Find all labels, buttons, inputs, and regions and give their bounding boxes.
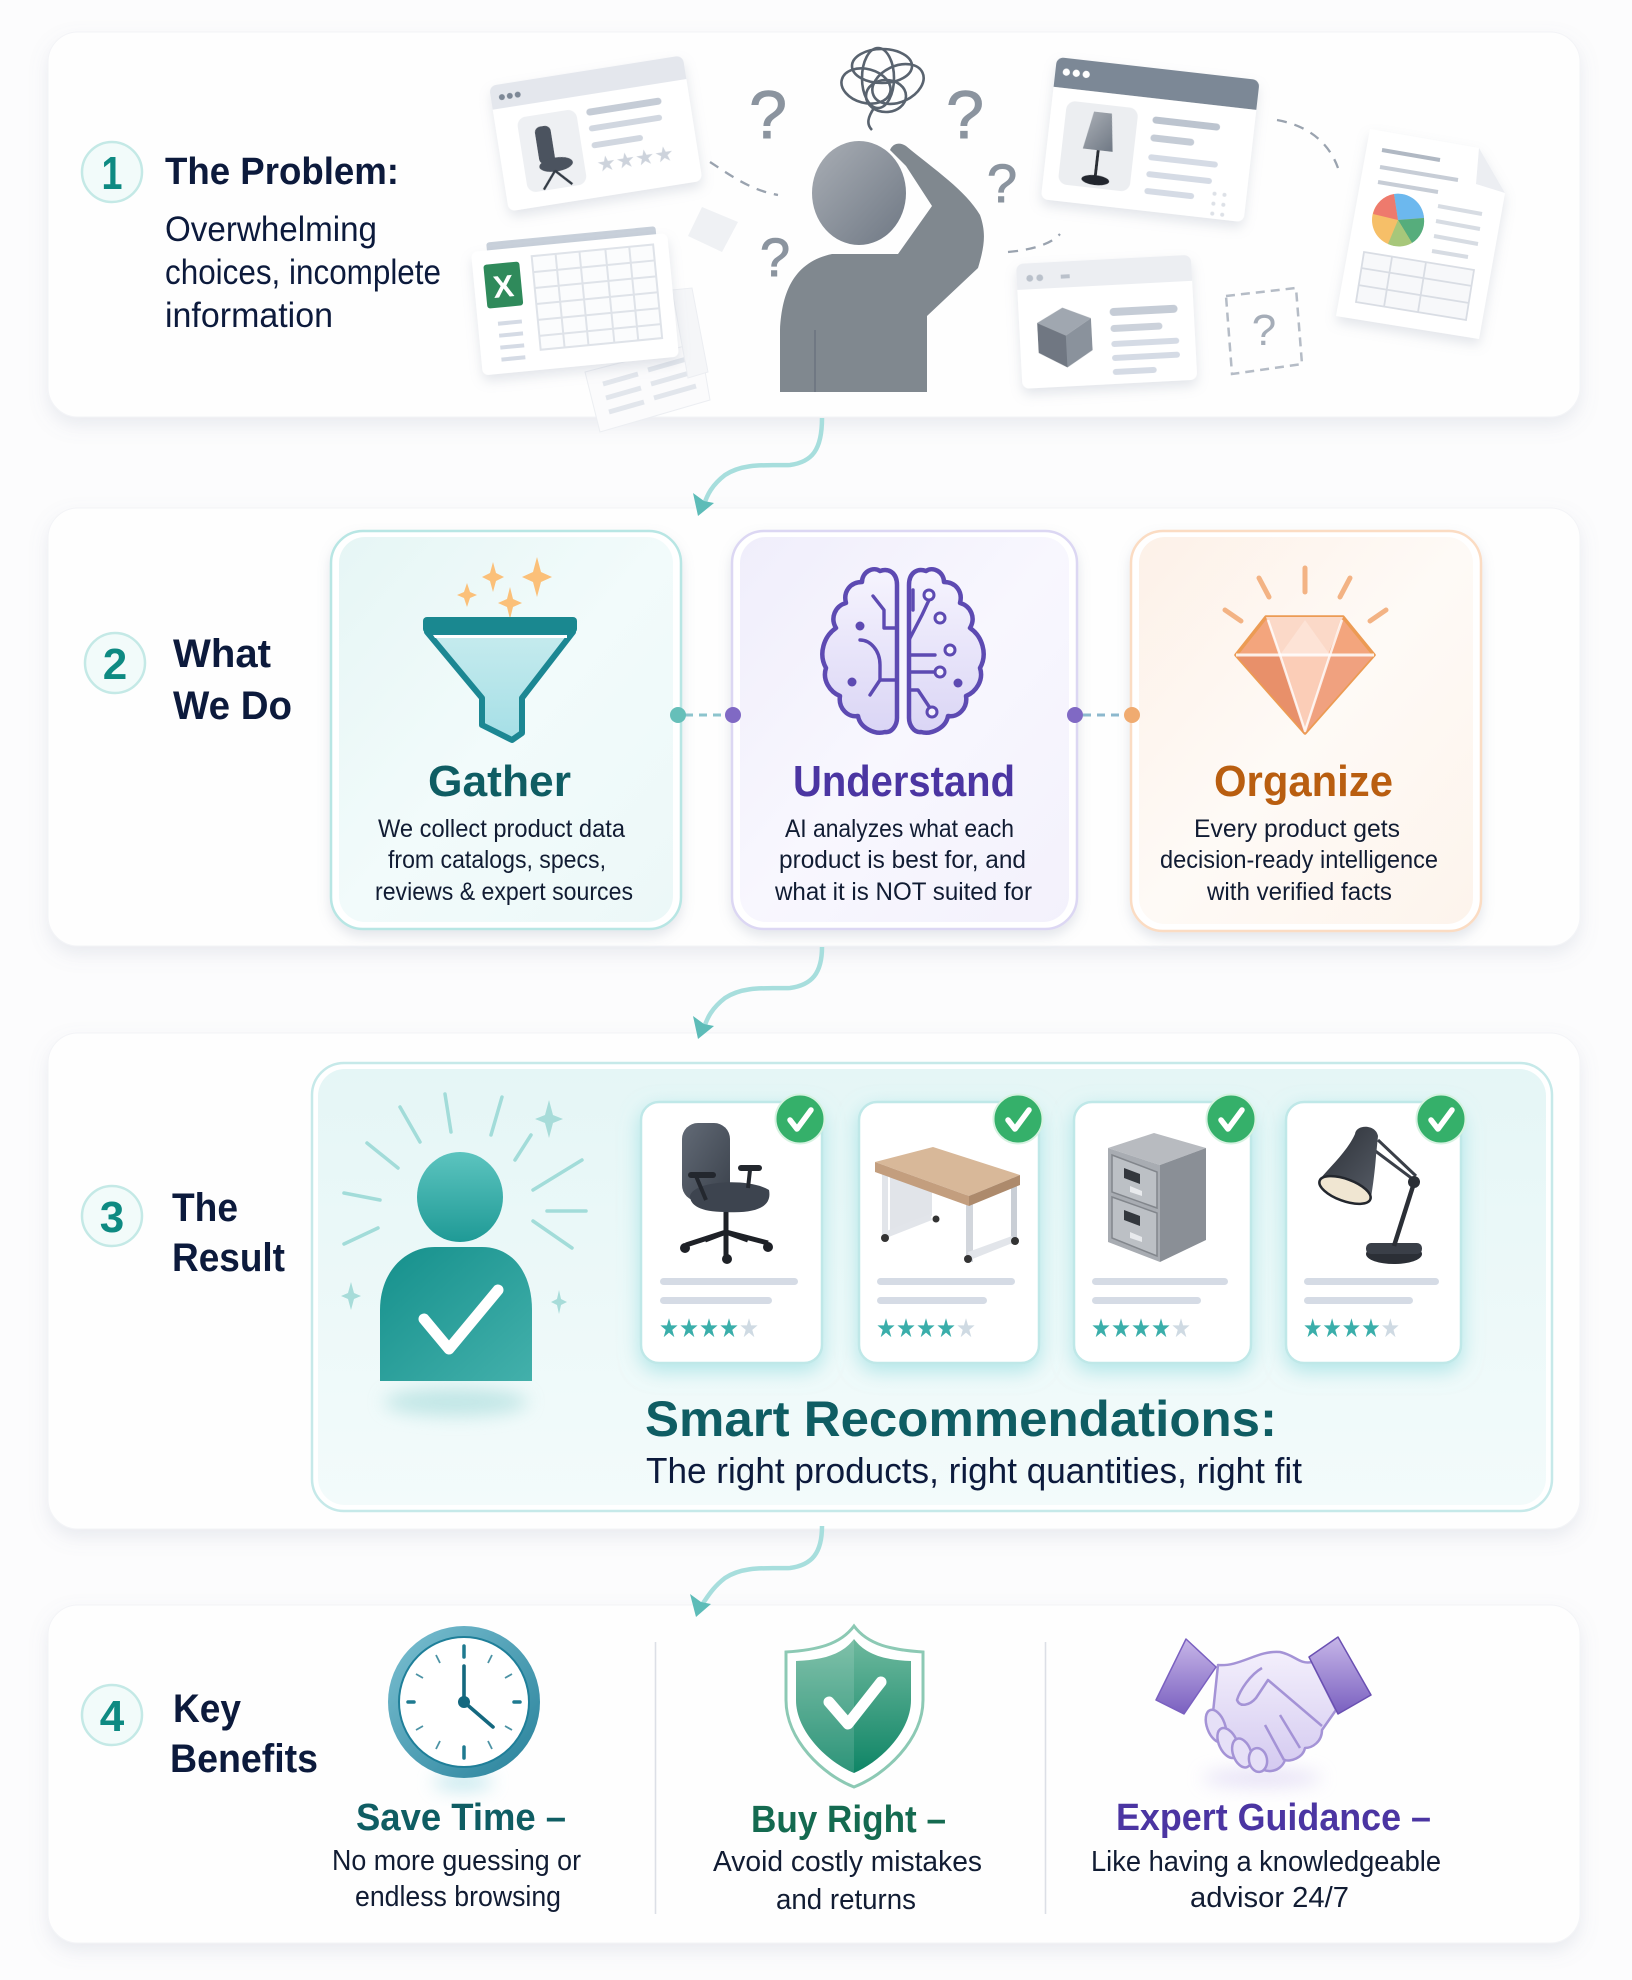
heading: save time: Save Time – — [356, 1797, 566, 1839]
icon: desk lamp — [1316, 1127, 1422, 1264]
heading: the result — [172, 1186, 285, 1280]
product card: filing cabinet — [1074, 1102, 1251, 1363]
text: gather description: from catalogs, specs, — [388, 846, 606, 874]
card: organize — [1131, 531, 1481, 931]
icon: rays above diamond — [1225, 568, 1386, 621]
icon: office chair — [680, 1123, 773, 1264]
text: gather description — [375, 815, 633, 906]
decorative dashed trails — [710, 120, 1338, 252]
icon: funnel — [423, 617, 577, 740]
icon: confused person — [780, 141, 984, 392]
text: problem description: choices, incomplete — [165, 253, 441, 292]
product card: desk lamp — [1286, 1102, 1461, 1363]
benefit: buy right — [713, 1626, 982, 1916]
panel: the result — [48, 1033, 1580, 1529]
placeholder lines and stars — [659, 1278, 798, 1343]
step badge 4 — [82, 1685, 142, 1745]
text: buy right description: Avoid costly mistakes — [713, 1846, 982, 1878]
icon: shield with check — [786, 1626, 923, 1787]
text: organize description: decision-ready intelligence — [1160, 846, 1438, 874]
benefit: save time — [332, 1626, 581, 1913]
text: problem description: Overwhelming — [165, 210, 377, 249]
panel: key benefits — [48, 1605, 1580, 1943]
heading: key benefits — [170, 1687, 318, 1781]
text: expert guidance description: advisor 24/7 — [1190, 1882, 1349, 1914]
icon: glow rays — [344, 1094, 586, 1248]
icon: browser card with chair: ★★★★ — [595, 142, 676, 177]
text: save time description: endless browsing — [355, 1881, 561, 1913]
step badge 1 — [82, 142, 142, 202]
connector: understand to organize — [1067, 707, 1140, 723]
text: buy right description: and returns — [776, 1884, 916, 1916]
icon: dashed question box — [1226, 288, 1302, 374]
connector: gather to understand — [670, 707, 741, 723]
heading: what we do: We Do — [173, 684, 292, 728]
icon: question marks: ? — [987, 154, 1017, 214]
placeholder lines and stars: ★★★★★ — [1091, 1313, 1191, 1343]
icon: browser card with lamp — [1041, 57, 1260, 222]
product card: desk — [859, 1102, 1039, 1363]
text: organize description: Every product gets — [1194, 815, 1400, 843]
text: expert guidance description: Like having a knowledgeable — [1091, 1846, 1441, 1878]
text: save time description — [332, 1845, 581, 1913]
icon: sparkles — [457, 557, 552, 619]
step badge 2 — [85, 633, 145, 693]
icon: satisfied person with check — [380, 1152, 532, 1416]
icon: question marks: ? — [946, 77, 984, 153]
icon: question marks: ? — [760, 228, 790, 288]
step badge 4: 4 — [100, 1692, 125, 1741]
icon: desk — [875, 1147, 1020, 1263]
panel: what we do — [48, 508, 1580, 946]
arrow: what we do to the result — [693, 947, 822, 1039]
heading: expert guidance: Expert Guidance – — [1116, 1797, 1431, 1839]
icon: spreadsheet card: X — [491, 268, 516, 305]
icon: question marks — [749, 77, 1017, 288]
heading: organize: Organize — [1214, 757, 1393, 806]
step badge 3: 3 — [100, 1193, 124, 1242]
inner panel: smart recommendations — [312, 1063, 1552, 1511]
placeholder lines and stars: ★★★★★ — [1303, 1313, 1400, 1343]
heading: what we do — [173, 632, 292, 728]
icon: sparkles around person — [341, 1100, 567, 1314]
text: problem description: information — [165, 296, 333, 335]
heading: understand: Understand — [793, 757, 1015, 806]
step badge 2: 2 — [103, 640, 127, 689]
heading: smart recommendations: Smart Recommendations: — [645, 1391, 1277, 1447]
placeholder lines and stars: ★★★★★ — [659, 1313, 759, 1343]
text: recommendations subtitle: The right products, right quantities, right fit — [646, 1450, 1302, 1491]
text: understand description: product is best for, and — [779, 846, 1026, 874]
icon: blank tilted note — [688, 207, 738, 252]
icon: browser card with chair — [489, 55, 702, 211]
icon: brain with circuits — [822, 569, 984, 733]
icon: loose paper behind spreadsheet — [585, 288, 710, 432]
icons: green check badges — [776, 1094, 1466, 1144]
placeholder lines and stars — [876, 1278, 1015, 1343]
arrow: the result to key benefits — [690, 1526, 822, 1617]
icon: spreadsheet card — [470, 225, 679, 375]
arrow: problem to what we do — [693, 418, 822, 516]
heading: key benefits: Benefits — [170, 1737, 318, 1781]
text: expert guidance description — [1091, 1846, 1441, 1914]
panel: the problem — [48, 32, 1580, 432]
icon: question in box: ? — [1252, 306, 1276, 355]
heading: what we do: What — [173, 632, 271, 676]
icon: tangled thought scribble — [837, 48, 930, 130]
heading: key benefits: Key — [173, 1687, 242, 1731]
text: organize description — [1160, 815, 1438, 906]
text: organize description: with verified facts — [1206, 878, 1392, 906]
heading: the result: The — [172, 1186, 238, 1230]
placeholder lines and stars — [1303, 1278, 1439, 1343]
step badge 1: 1 — [102, 147, 122, 199]
heading: the result: Result — [172, 1236, 285, 1280]
heading: buy right: Buy Right – — [751, 1799, 946, 1841]
divider lines — [656, 1642, 1046, 1914]
text: understand description: AI analyzes what each — [785, 815, 1014, 843]
placeholder lines and stars: ★★★★★ — [876, 1313, 976, 1343]
text: gather description: reviews & expert sources — [375, 878, 633, 906]
icon: browser card with box — [1016, 255, 1197, 389]
text: understand description — [774, 815, 1032, 906]
icon: document with pie chart — [1336, 129, 1505, 339]
heading: gather: Gather — [428, 757, 571, 806]
text: problem description — [165, 210, 441, 335]
text: buy right description — [713, 1846, 982, 1916]
icon: filing cabinet — [1108, 1133, 1206, 1262]
heading: the problem: The Problem: — [165, 151, 399, 193]
card: gather — [331, 531, 681, 929]
text: gather description: We collect product data — [378, 815, 625, 843]
benefit: expert guidance — [1091, 1637, 1441, 1914]
icon: diamond — [1236, 617, 1374, 733]
icon: clock — [388, 1626, 540, 1790]
step badge 3 — [82, 1186, 142, 1246]
card: understand — [732, 531, 1077, 929]
placeholder lines and stars — [1091, 1278, 1228, 1343]
text: understand description: what it is NOT suited for — [774, 878, 1032, 906]
product card: chair — [641, 1102, 822, 1363]
text: save time description: No more guessing or — [332, 1845, 581, 1877]
icon: handshake — [1156, 1637, 1371, 1786]
icon: question marks: ? — [749, 77, 787, 153]
